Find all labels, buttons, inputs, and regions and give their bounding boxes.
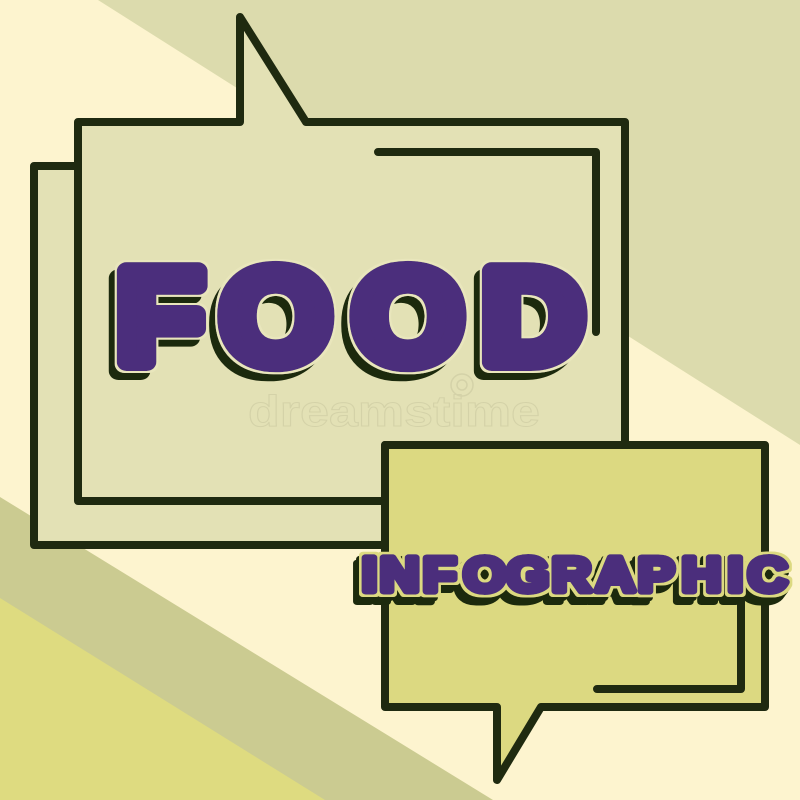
background: olive diagonal top right: [98, 0, 800, 445]
watermark: [248, 374, 540, 436]
watermark: dreamstime: [248, 387, 540, 436]
main bubble inner accent line: [378, 152, 596, 332]
secondary speech bubble: [385, 445, 765, 780]
background: muted band bottom left: [0, 497, 493, 800]
background: yellow-green corner bottom left: [0, 598, 325, 800]
rear speech panel: [34, 166, 385, 545]
heading: FOOD: FOOD: [117, 242, 584, 390]
main speech bubble: [78, 17, 625, 501]
heading: INFOGRAPHIC: INFOGRAPHIC: [362, 547, 787, 601]
secondary bubble inner accent line: [597, 590, 741, 689]
